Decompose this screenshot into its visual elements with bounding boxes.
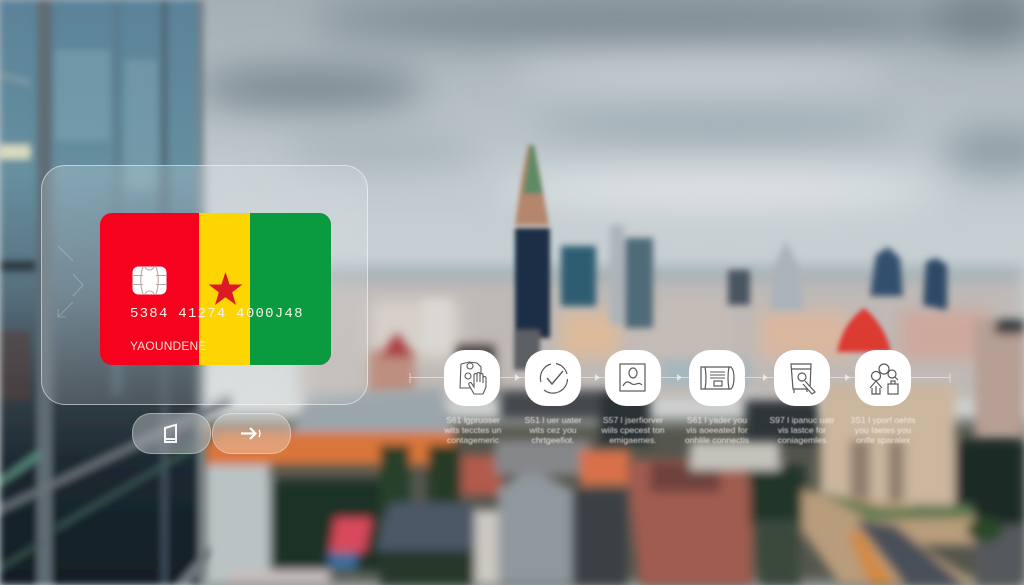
step 6: people icon xyxy=(855,350,911,406)
lower buildings xyxy=(205,430,455,465)
step 2: check circle icon xyxy=(525,350,581,406)
step 4 caption: onhlile connectis xyxy=(685,435,749,445)
tower xyxy=(515,145,549,225)
step 1 caption: S61 lgpruoser xyxy=(446,415,500,425)
step 3: portrait picture icon xyxy=(605,350,661,406)
icon: card chip xyxy=(132,266,167,294)
icon: red star xyxy=(208,272,242,305)
cardholder name: YAOUNDENE xyxy=(130,339,206,353)
credit card in red, yellow and green flag colours xyxy=(100,213,331,365)
step 2 caption: wits cez you xyxy=(529,425,577,435)
step 4 caption xyxy=(684,415,750,445)
button: phone icon xyxy=(132,413,211,454)
step 1 caption xyxy=(444,415,502,446)
step 2 caption xyxy=(524,415,582,445)
step 5: phone with search icon xyxy=(774,350,830,406)
step 1 caption: wits tecctes un xyxy=(444,425,501,435)
step 6 caption xyxy=(850,415,916,445)
step 6 caption: onlfe sparalex xyxy=(856,435,910,445)
step 2 caption: S51 l uer uater xyxy=(524,415,582,425)
step 3 caption: S57 l jserfiorver xyxy=(603,415,663,425)
step 5 caption xyxy=(769,415,835,446)
icon: faint chevron arrows on glass panel xyxy=(58,246,84,318)
process flow line with arrows xyxy=(410,373,950,383)
step 3 caption: emigaemes. xyxy=(609,435,657,445)
step 4 caption: vis aoeeated for xyxy=(686,425,748,435)
step 5 caption: vis lastce for xyxy=(778,425,826,435)
step 1: touch icon xyxy=(444,350,500,406)
step 3 caption: wiils cpecest ton xyxy=(601,425,665,435)
step 2 caption: chrtgeefiot. xyxy=(532,435,574,445)
step 4 caption: S61 l yader you xyxy=(687,415,747,425)
card number: 5384 41274 4000J48 xyxy=(130,306,304,322)
step 1 caption: contagemeric xyxy=(447,435,499,445)
foreground glass building xyxy=(0,0,198,585)
step 6 caption: you Iaetes you xyxy=(855,425,911,435)
step 5 caption: coniagemles xyxy=(778,435,826,445)
red dome xyxy=(837,308,891,352)
step 6 caption: 3S1 l yporf oehts xyxy=(850,415,916,425)
button: arrow icon xyxy=(212,413,291,454)
step 4: ticket document icon xyxy=(689,350,745,406)
step 3 caption xyxy=(600,415,665,446)
step 5 caption: S97 l ipanuc uatr xyxy=(769,415,835,425)
panel: frosted glass card holder xyxy=(41,165,368,405)
